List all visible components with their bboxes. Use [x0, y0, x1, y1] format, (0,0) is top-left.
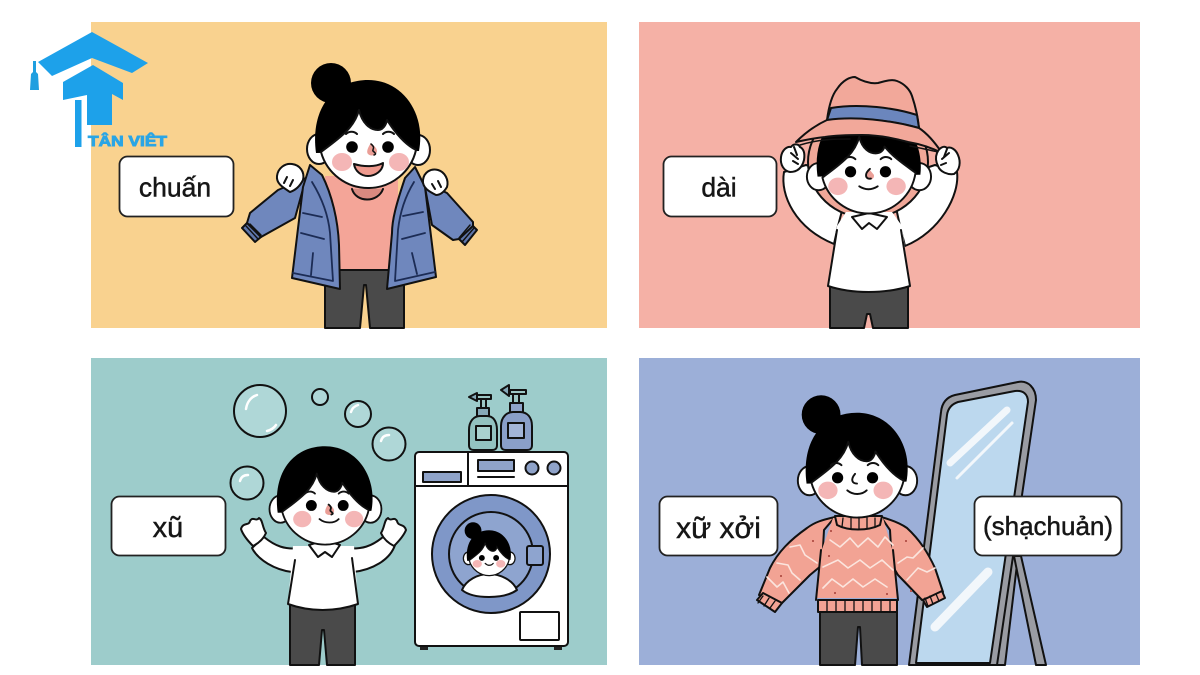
- head: [269, 446, 381, 545]
- logo: Tân Việt graduation cap: [30, 32, 167, 150]
- hands: [277, 164, 303, 192]
- icon: vertical post: [75, 100, 82, 147]
- label: chuấn: [120, 156, 234, 216]
- figure: child putting on a pink hat: [781, 77, 960, 328]
- icon: mortarboard roof: [38, 32, 148, 76]
- label: dài: [664, 156, 776, 216]
- head: [307, 63, 430, 188]
- reflection: small girl in drum: [462, 522, 517, 597]
- label: xũ: xũ: [153, 512, 183, 544]
- icon: upward arrow: [63, 65, 123, 125]
- logo text: TÂN VIÊT: [88, 132, 167, 150]
- panel: chuấn (jacket): [91, 22, 607, 328]
- bottles: [469, 385, 532, 450]
- figure: girl in pink sweater: [757, 395, 945, 665]
- head: [807, 108, 931, 213]
- label: xữ xởi: [660, 496, 778, 556]
- mirror: [909, 382, 1046, 665]
- hands: [781, 144, 804, 172]
- panel: xũ (washing machine and bubbles): [91, 358, 607, 665]
- panel: xữ xởi (sweater and mirror): [639, 358, 1140, 665]
- hat: [796, 77, 942, 153]
- label: chuấn: chuấn: [139, 172, 211, 202]
- label: (shạchuản): [974, 496, 1122, 556]
- icon: tassel: [30, 61, 39, 90]
- panel: dài (hat): [639, 22, 1140, 328]
- label: xũ: [112, 496, 226, 556]
- figure: child with raised hands: [241, 446, 406, 665]
- label: (shạchuản): (shạchuản): [983, 511, 1113, 541]
- label: dài: dài: [701, 172, 737, 202]
- head: [798, 395, 917, 518]
- figure: girl trying on a blue jacket: [242, 63, 477, 328]
- label: xữ xởi: xữ xởi: [676, 512, 761, 545]
- bubbles: [230, 385, 406, 500]
- washing machine: [415, 452, 568, 650]
- back brim of hat: [808, 106, 928, 218]
